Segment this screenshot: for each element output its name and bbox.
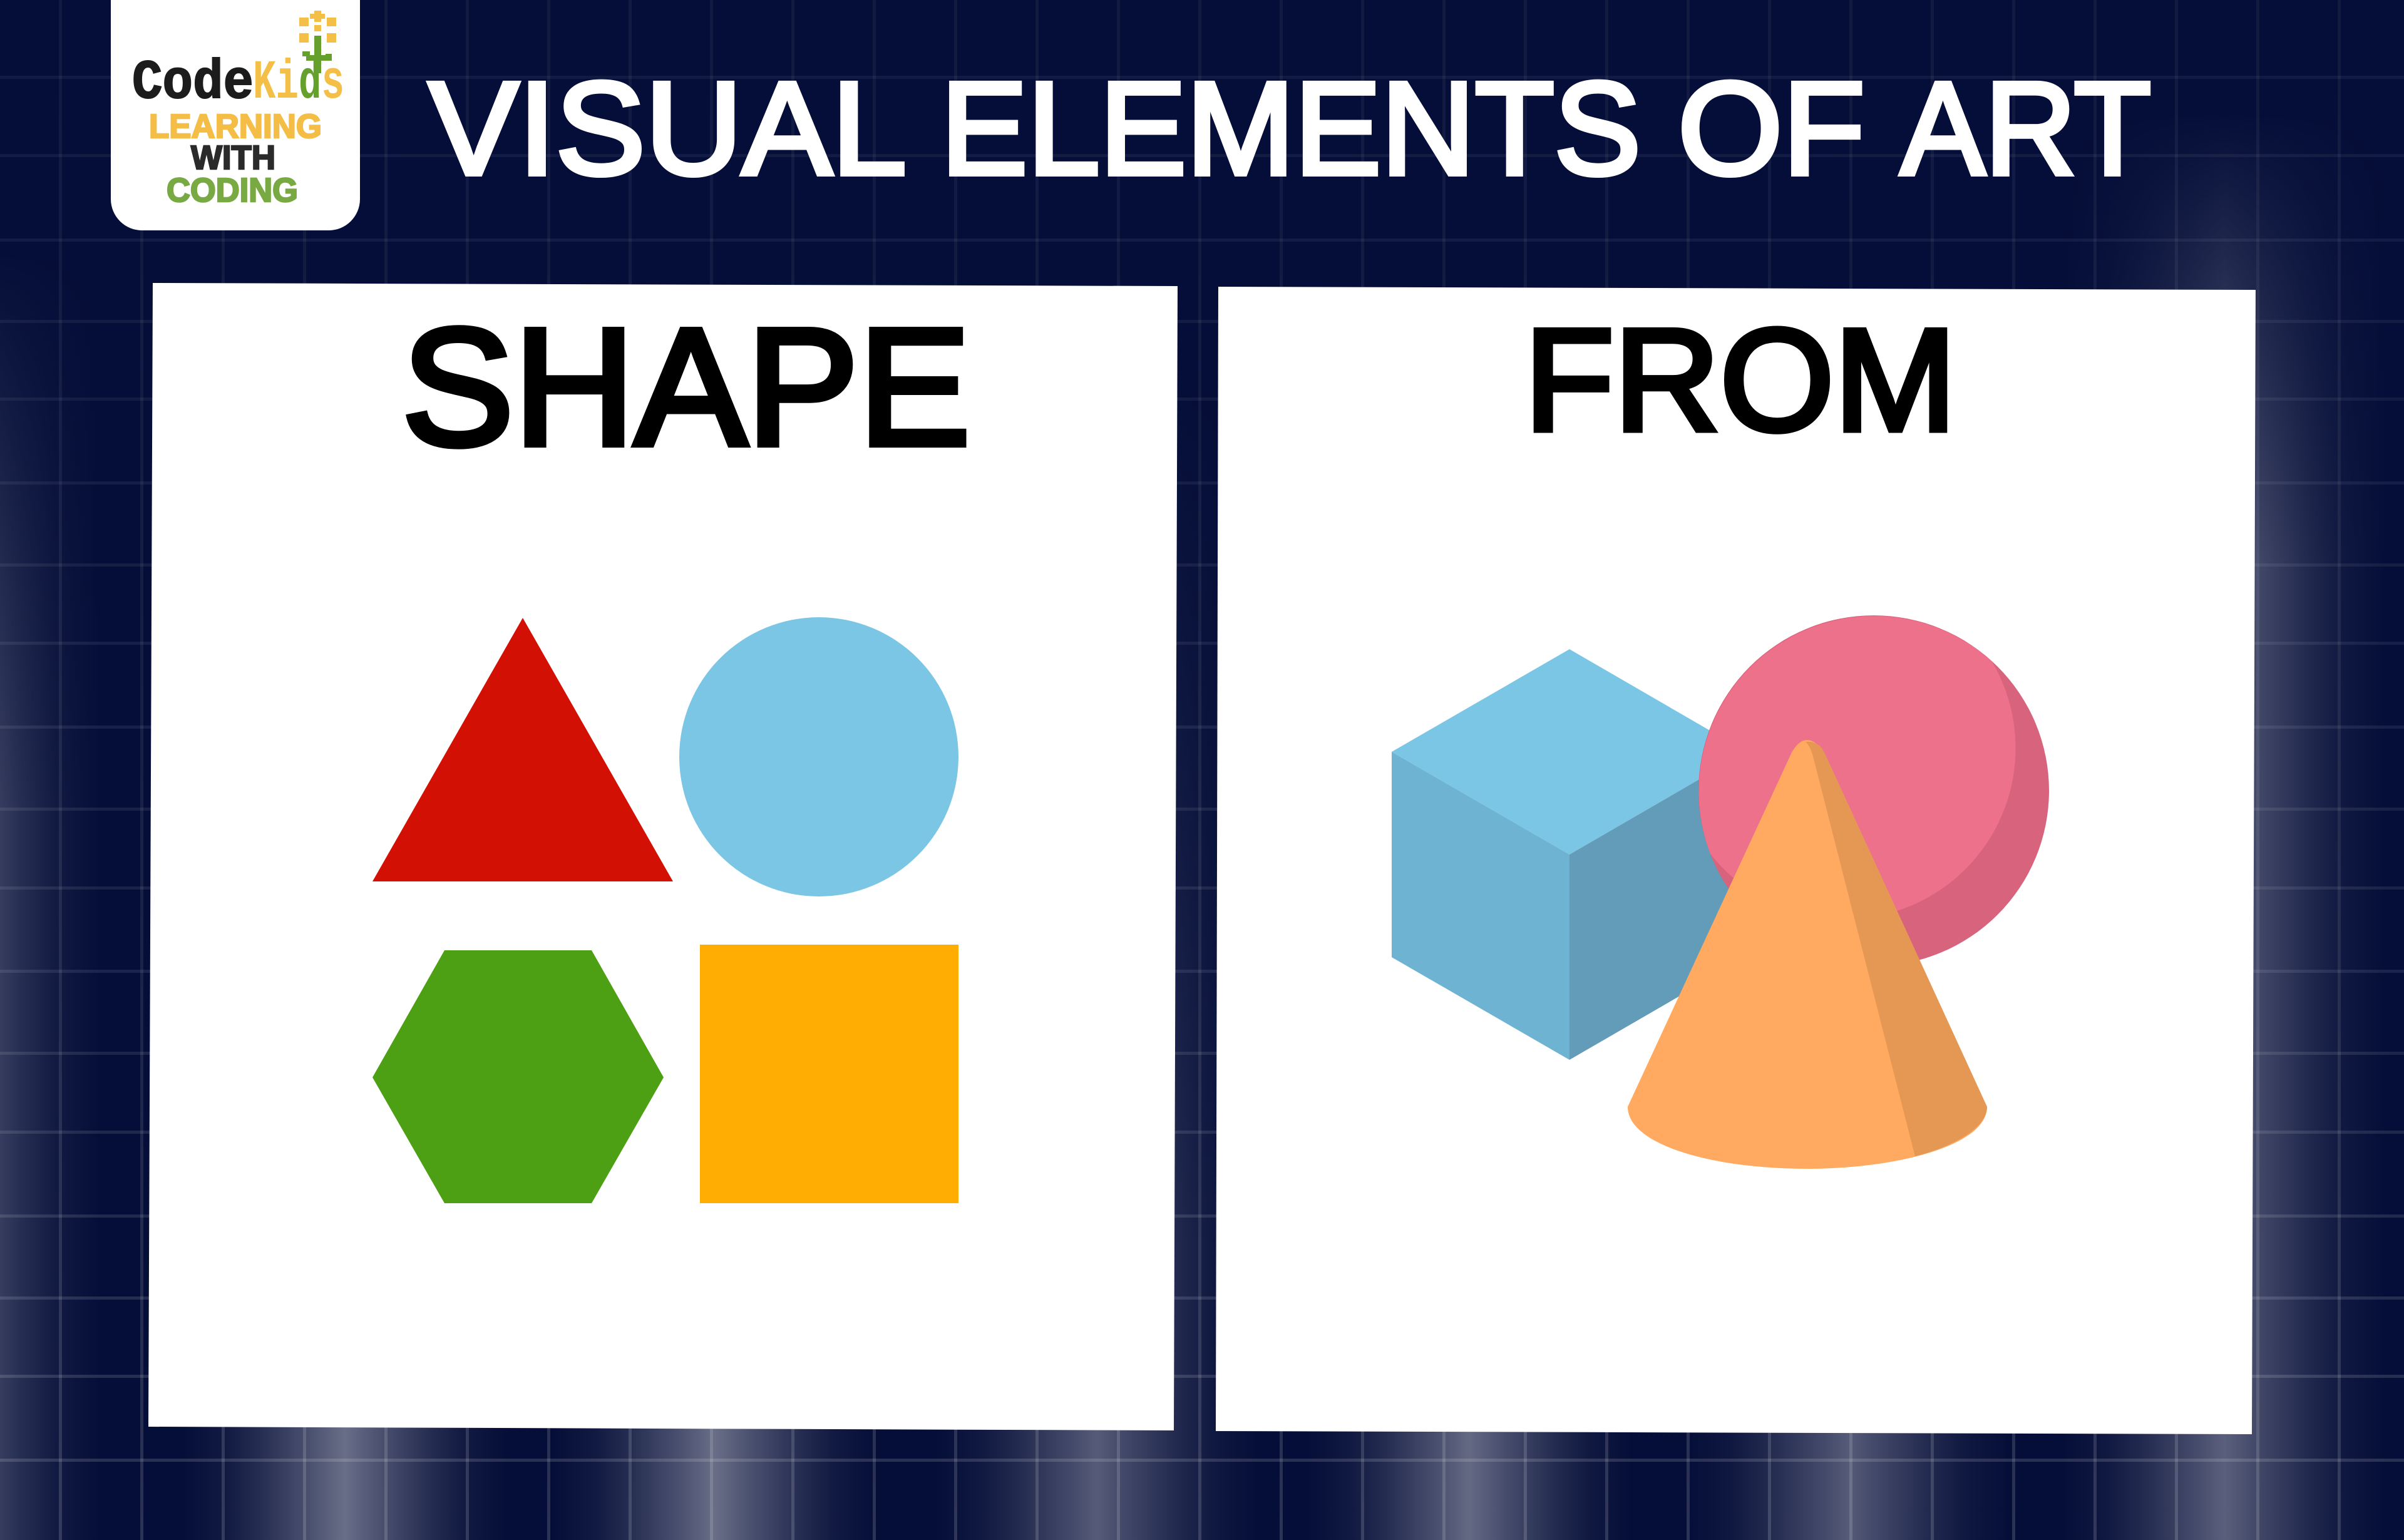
heading: from: FROM	[1524, 299, 1956, 461]
icon: orange square	[700, 945, 958, 1203]
title: ART	[1901, 54, 2151, 202]
logo tagline: learning: LEARNING	[149, 108, 322, 145]
logo wordmark kids: Kids	[253, 53, 344, 115]
icon: green hexagon	[372, 950, 664, 1203]
logo wordmark: Code	[132, 53, 254, 115]
logo icon: pixel flower	[299, 11, 336, 73]
icon: red triangle	[372, 618, 673, 881]
panel background	[148, 283, 1178, 1430]
icon: cube	[1392, 649, 1747, 1060]
panel: shape	[148, 283, 1178, 1430]
logo card	[111, 0, 360, 230]
logo: CodeKids badge	[111, 0, 360, 230]
logo tagline: coding: CODING	[167, 172, 298, 209]
panel background	[1216, 287, 2256, 1434]
title: VISUAL	[429, 54, 907, 202]
title: ELEMENTS	[941, 54, 1641, 202]
heading: shape: SHAPE	[402, 294, 970, 480]
title: OF	[1678, 54, 1865, 202]
panel: form	[1216, 287, 2256, 1434]
title	[429, 54, 2151, 202]
icon: cone	[1628, 740, 1987, 1169]
logo tagline: with: WITH	[191, 139, 275, 177]
icon: sphere	[1698, 615, 2049, 966]
icon: blue circle	[679, 617, 958, 896]
